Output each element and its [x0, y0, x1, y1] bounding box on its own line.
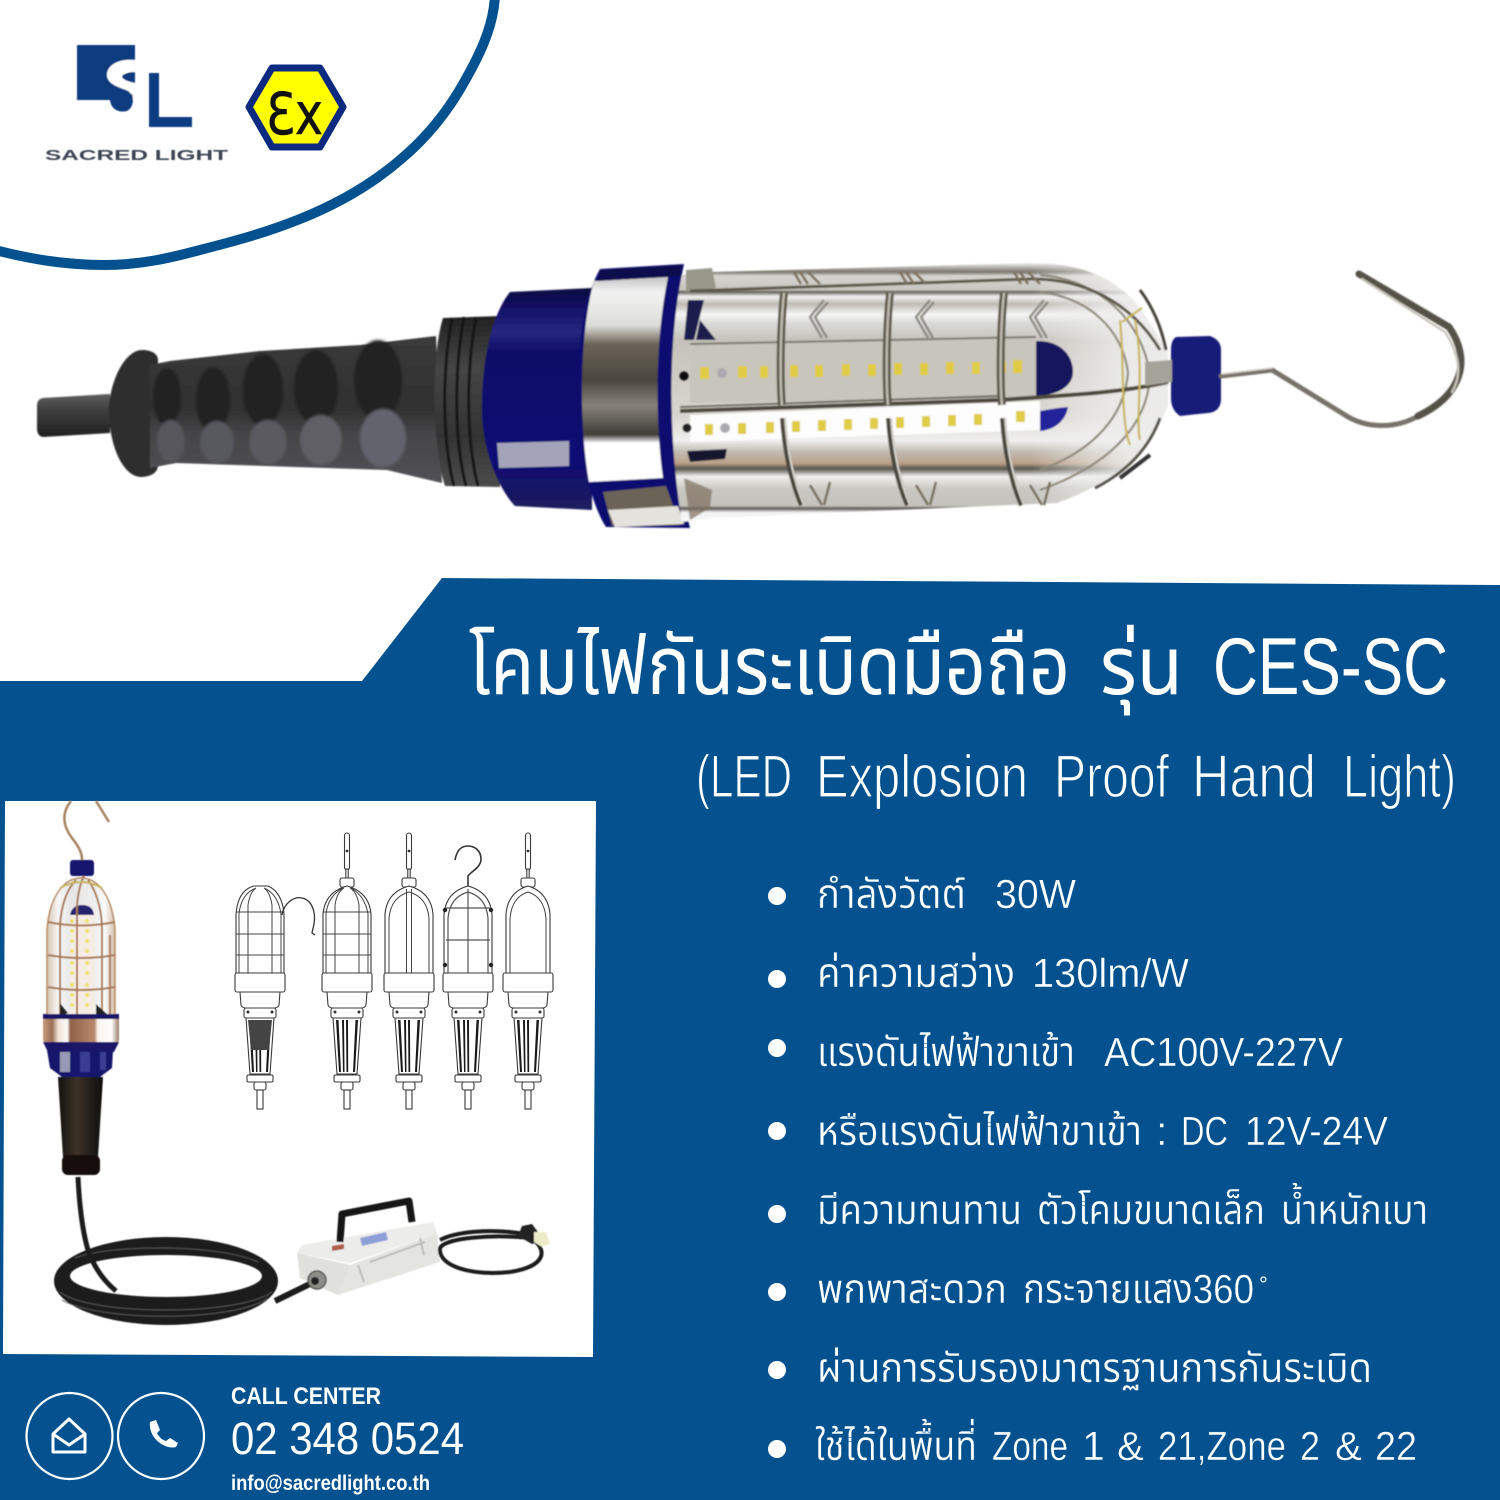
title: โคมไฟกันระเบิดมือถือ	[469, 622, 1070, 712]
spec: zones: &	[1117, 1423, 1144, 1469]
spec: DC voltage: หรือแรงดันไฟฟ้าขาเข้า	[817, 1108, 1142, 1154]
spec: wattage: กำลังวัตต์	[817, 871, 966, 917]
icon: Ex certification hexagon	[249, 68, 343, 148]
title: รุ่น	[1100, 622, 1183, 715]
spec: zones: 1	[1082, 1423, 1105, 1469]
black grip	[58, 1077, 103, 1157]
spec: zones: &	[1335, 1423, 1362, 1469]
spec: zones	[768, 1418, 1417, 1469]
line drawing: side hook model	[235, 886, 315, 1109]
handle flange	[109, 350, 158, 477]
threaded ring	[435, 316, 500, 487]
subtitle: (LED	[696, 743, 792, 810]
base fittings	[60, 1003, 108, 1016]
upper LED strip	[690, 338, 1036, 403]
blue end nut	[1171, 336, 1221, 416]
dome reflections	[1040, 275, 1150, 490]
subtitle: Proof	[1054, 743, 1169, 810]
line drawing: front hook model	[443, 846, 493, 1109]
spec: wattage: 30W	[995, 871, 1076, 917]
contact block	[26, 1383, 464, 1495]
navy collar	[482, 288, 592, 510]
icon: phone	[118, 1393, 204, 1479]
spec: zones: Zone	[992, 1423, 1068, 1469]
icon: mail	[26, 1393, 112, 1479]
main product photo: hand lamp	[37, 263, 1461, 528]
spec: durability: น้ำหนักเบา	[1281, 1182, 1428, 1233]
line drawing: slim guard model	[503, 833, 553, 1109]
spec: certification: ผ่านการรับรองมาตรฐานการกันระเบิด	[817, 1345, 1372, 1391]
line drawing: wire cage model	[322, 833, 372, 1109]
rubber grip	[150, 336, 442, 483]
brass wires	[1120, 308, 1142, 445]
subtitle: Light)	[1343, 743, 1456, 810]
hook	[64, 801, 109, 864]
spec: durability: ตัวโคมขนาดเล็ก	[1037, 1187, 1265, 1233]
blue content panel	[0, 578, 1500, 1500]
spec: AC voltage	[768, 1029, 1344, 1075]
logo wordmark: SACRED LIGHT	[45, 147, 228, 164]
title	[469, 622, 1448, 715]
spec: zones: ใช้ได้ในพื้นที่	[815, 1418, 977, 1469]
glass dome	[47, 878, 115, 1017]
spec: zones: 21,Zone	[1158, 1423, 1286, 1469]
glass cage	[672, 263, 1168, 522]
subtitle: Hand	[1192, 743, 1316, 810]
cable stub	[37, 394, 110, 437]
call center label: CALL CENTER	[231, 1383, 381, 1410]
cable and coil	[54, 1177, 316, 1325]
LED tube	[70, 906, 95, 1018]
spec: durability	[768, 1182, 1428, 1233]
panel: product gallery	[3, 801, 596, 1357]
subtitle: Explosion	[816, 743, 1028, 810]
spec: luminous efficacy: 130lm/W	[1032, 950, 1189, 996]
logo: Sacred Light	[45, 45, 228, 164]
spec: luminous efficacy	[768, 950, 1189, 996]
spec: AC voltage: AC100V-227V	[1104, 1029, 1344, 1075]
spec: portability: °	[1259, 1272, 1268, 1297]
blue end cap	[1036, 341, 1073, 396]
hook	[1221, 274, 1461, 426]
lower LED strip	[690, 401, 1040, 442]
email: info@sacredlight.co.th	[231, 1472, 430, 1495]
LED dots	[70, 919, 89, 1007]
spec: wattage	[768, 871, 1076, 917]
line drawing: open guard model	[384, 833, 434, 1109]
spec: portability	[768, 1266, 1268, 1312]
header corner arc	[0, 0, 495, 265]
copper cage	[48, 876, 115, 1017]
steel ring	[578, 264, 690, 528]
LED chips	[700, 360, 1025, 435]
spec: AC voltage: แรงดันไฟฟ้าขาเข้า	[817, 1029, 1075, 1075]
spec list	[768, 871, 1428, 1469]
spec: zones: 22	[1375, 1423, 1417, 1469]
spec: DC voltage: :	[1156, 1108, 1167, 1154]
spec: portability: กระจายแสง360	[1023, 1266, 1254, 1312]
phone number: 02 348 0524	[231, 1413, 464, 1464]
spec: durability: มีความทนทาน	[817, 1187, 1022, 1233]
power cord and plug	[440, 1224, 550, 1273]
logo mark	[77, 45, 192, 127]
spec: DC voltage: DC	[1181, 1108, 1228, 1154]
base brackets	[684, 300, 716, 340]
cage wires	[680, 279, 1168, 478]
spec: DC voltage	[768, 1108, 1389, 1154]
spec: zones: 2	[1300, 1423, 1320, 1469]
navy base	[47, 1050, 113, 1077]
spec: portability: พกพาสะดวก	[817, 1266, 1007, 1312]
photo: hanging lamp	[43, 801, 550, 1325]
spec: DC voltage: 12V-24V	[1245, 1108, 1389, 1154]
spec: luminous efficacy: ค่าความสว่าง	[817, 950, 1015, 996]
grip end ring	[62, 1155, 100, 1175]
end nut	[70, 860, 94, 876]
icon: Ex certification hexagon: Ɛx	[266, 80, 323, 148]
control box	[297, 1201, 440, 1295]
copper collar	[43, 1016, 119, 1050]
subtitle	[696, 743, 1456, 810]
